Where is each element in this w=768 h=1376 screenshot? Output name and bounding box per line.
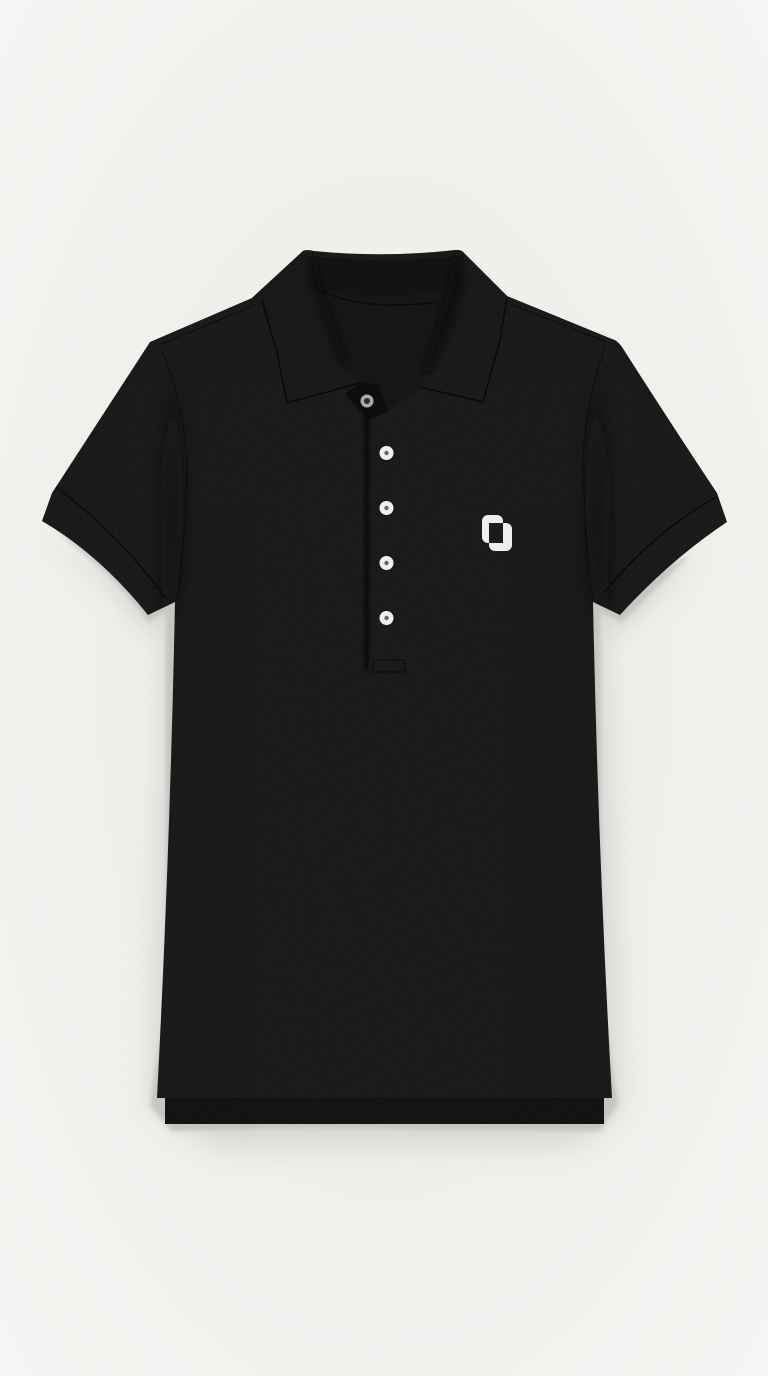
white button 3 <box>380 556 394 570</box>
white button 1 <box>380 446 394 460</box>
right collar edge <box>420 298 507 402</box>
white button 4 <box>380 611 394 625</box>
product image: black polo shirt <box>42 250 727 1158</box>
back neck seam <box>314 288 438 305</box>
left collar leaf <box>252 251 360 403</box>
chest logo <box>482 515 512 551</box>
right sleeve cuff <box>605 497 716 592</box>
white button 2 <box>380 501 394 515</box>
top button <box>360 394 374 408</box>
soft drop shadow <box>45 535 700 1148</box>
neck interior <box>308 256 464 412</box>
right collar leaf <box>420 254 507 402</box>
placket <box>345 383 406 672</box>
back collar band <box>308 256 462 296</box>
shirt silhouette <box>42 250 727 1124</box>
armhole seams <box>162 345 606 600</box>
shirt <box>40 245 730 1130</box>
close contact shadow <box>50 528 690 1131</box>
placket seam <box>365 415 368 670</box>
shoulder seams <box>162 304 606 344</box>
neck inner shadows <box>308 258 464 373</box>
shading on fabric <box>40 245 730 1130</box>
left collar edge <box>262 300 360 403</box>
fabric knit texture <box>40 245 730 1130</box>
left sleeve cuff <box>56 487 166 598</box>
